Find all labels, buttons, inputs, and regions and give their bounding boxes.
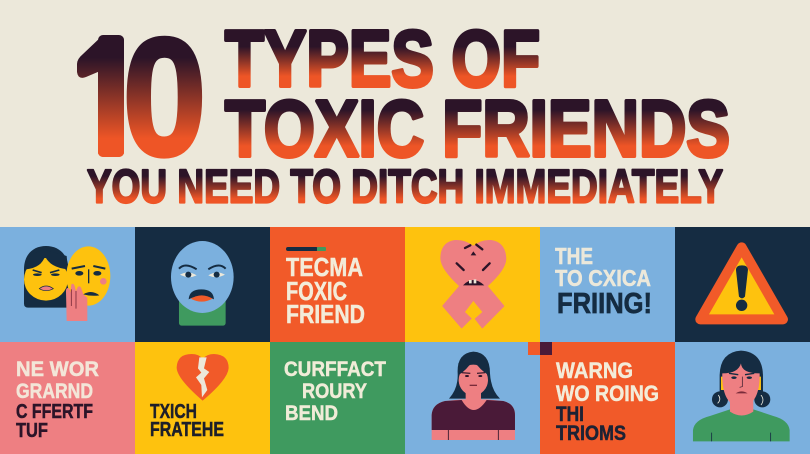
- text: the to cxica friing: THE: [555, 243, 593, 269]
- text: txich fratehe: [150, 401, 224, 441]
- text: pink tile: [16, 357, 99, 442]
- icon: two faces with mask: [24, 246, 110, 321]
- text: tecma foxic friend: FOXIC: [286, 278, 347, 306]
- text: warng wo roing: THI: [556, 403, 584, 426]
- icon: angry face: [171, 241, 234, 326]
- panel: woman in green top: [675, 342, 810, 454]
- text: the to cxica friing: FRIING!: [557, 288, 652, 320]
- text: green tile: BEND: [285, 401, 338, 425]
- text: pink tile: NE WOR: [16, 357, 99, 381]
- text: green tile: ROURY: [302, 379, 367, 403]
- panel: broken heart: [135, 342, 270, 454]
- panel: warning: [675, 227, 810, 342]
- text: tecma foxic friend: FRIEND: [286, 301, 365, 329]
- panel: pink text tile: [0, 342, 135, 454]
- text: warng wo roing: WARNG: [556, 358, 633, 383]
- icon: broken heart: [177, 354, 229, 401]
- text: green tile: [284, 357, 386, 425]
- decorative squares: [528, 342, 552, 355]
- decorative bar: [286, 247, 326, 251]
- panel: angry friend: [135, 227, 270, 342]
- text: warng wo roing: WO ROING: [556, 381, 659, 406]
- title: number 10: [77, 35, 202, 159]
- title: [77, 28, 730, 204]
- title: types of: TYPES OF: [225, 14, 540, 103]
- icon: woman portrait: [432, 352, 515, 440]
- text: txich fratehe: FRATEHE: [150, 419, 224, 441]
- icon: woman portrait with curls: [693, 351, 790, 441]
- panel: woman in plum top: [405, 342, 540, 454]
- panel: green text tile: [270, 342, 405, 454]
- text: tecma foxic friend: [286, 254, 365, 329]
- icon: warning triangle: [700, 247, 783, 319]
- panel: heart ribbon: [405, 227, 540, 342]
- text: pink tile: C FFERTF: [16, 401, 93, 423]
- text: pink tile: GRARND: [16, 379, 93, 403]
- text: tecma foxic friend: TECMA: [286, 254, 363, 282]
- text: warng wo roing: [556, 358, 659, 445]
- panel: two-faced friend: [0, 227, 135, 342]
- icon: pink heart ribbon face: [441, 241, 506, 328]
- panel: orange text tile: [270, 227, 405, 342]
- text: warng wo roing: TRIOMS: [556, 422, 626, 445]
- text: pink tile: TUF: [16, 420, 48, 442]
- panel: orange warning text tile: [528, 342, 675, 454]
- panel: blue text tile: [540, 227, 675, 342]
- title: number 10: 0: [122, 3, 206, 191]
- text: the to cxica friing: [555, 243, 652, 320]
- text: the to cxica friing: TO CXICA: [555, 265, 651, 291]
- text: green tile: CURFFACT: [284, 357, 386, 381]
- text: txich fratehe: TXICH: [150, 401, 197, 423]
- title: number 10: 1: [66, 5, 158, 190]
